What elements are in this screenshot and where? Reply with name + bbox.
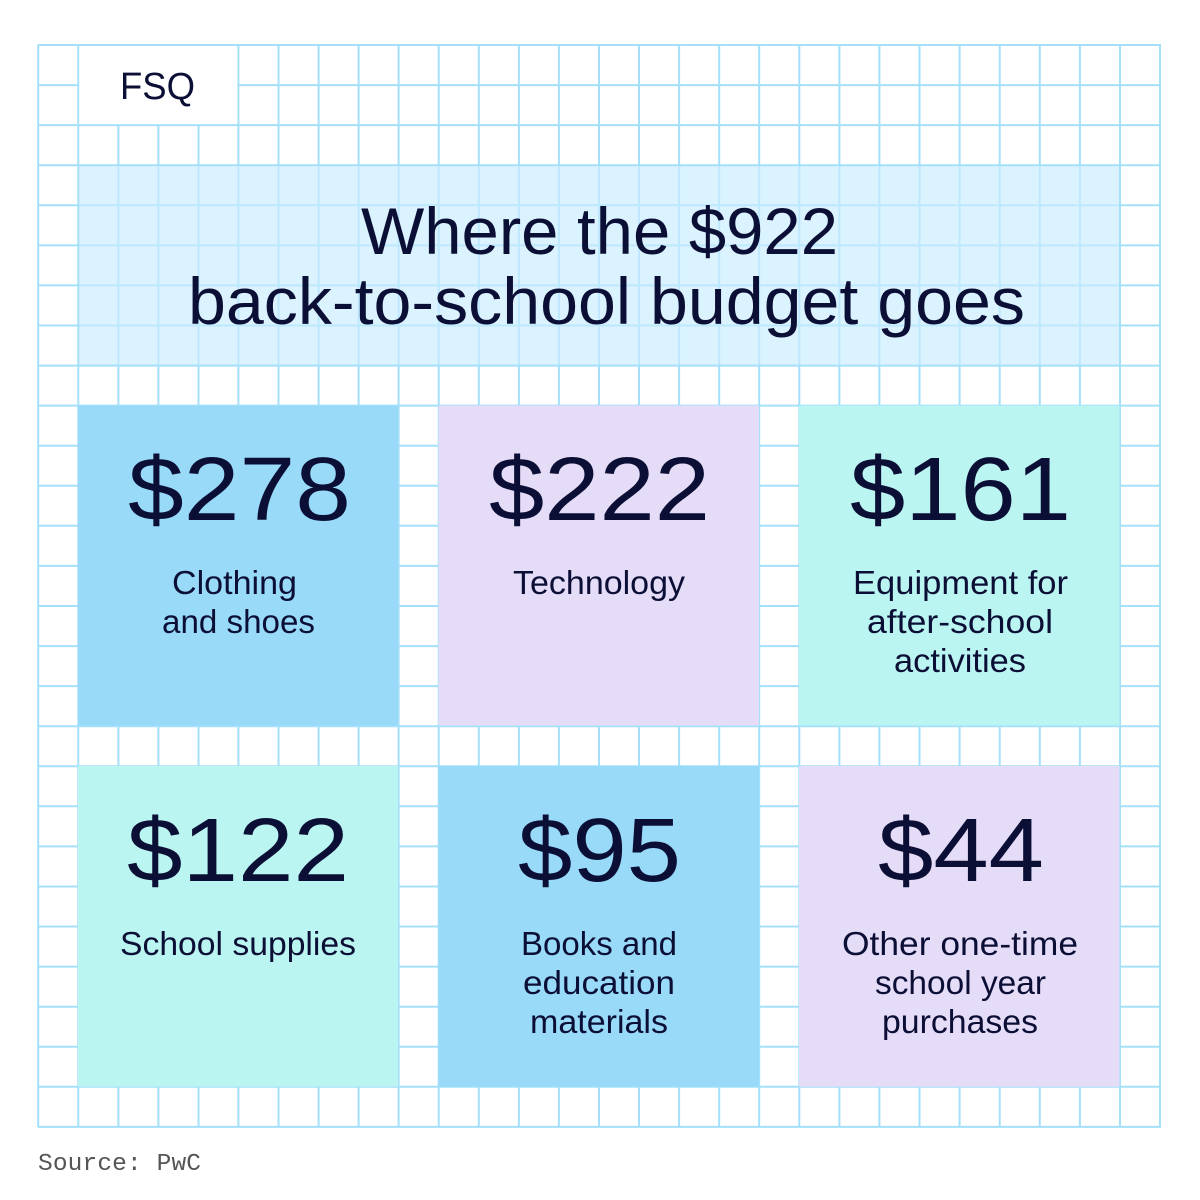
logo: FSQ: [79, 46, 237, 124]
label: Clothing: [172, 564, 297, 601]
value: $122: [127, 801, 349, 901]
value: $222: [489, 440, 710, 540]
title: [188, 194, 1025, 338]
label: and shoes: [162, 603, 315, 640]
label: [162, 564, 315, 640]
label: school year: [875, 964, 1046, 1001]
panel: technology: [438, 406, 759, 726]
label: [842, 925, 1078, 1040]
title: Where the $922: [361, 194, 838, 268]
label: Technology: [513, 564, 686, 601]
value: $161: [850, 440, 1071, 540]
label: materials: [530, 1003, 668, 1040]
title: back-to-school budget goes: [188, 264, 1025, 338]
label: after-school: [867, 603, 1053, 640]
value: $44: [878, 801, 1044, 901]
label: Equipment for: [853, 564, 1068, 601]
label: activities: [894, 642, 1026, 679]
label: purchases: [882, 1003, 1038, 1040]
value: $95: [518, 801, 681, 901]
label: Other one-time: [842, 925, 1078, 962]
panel: books and education materials: [438, 766, 759, 1087]
label: [853, 564, 1068, 679]
title panel: [78, 165, 1120, 365]
value: $278: [128, 440, 351, 540]
logo: FSQ: FSQ: [120, 66, 195, 108]
label: Books and: [521, 925, 677, 962]
panel: clothing and shoes: [78, 406, 398, 726]
label: [521, 925, 677, 1040]
panel: other one-time school year purchases: [799, 766, 1120, 1087]
source note: Source: PwC: [38, 1151, 201, 1178]
panel: school supplies: [78, 766, 398, 1087]
label: School supplies: [120, 925, 356, 962]
panel: equipment for after-school activities: [799, 406, 1120, 726]
label: education: [523, 964, 675, 1001]
